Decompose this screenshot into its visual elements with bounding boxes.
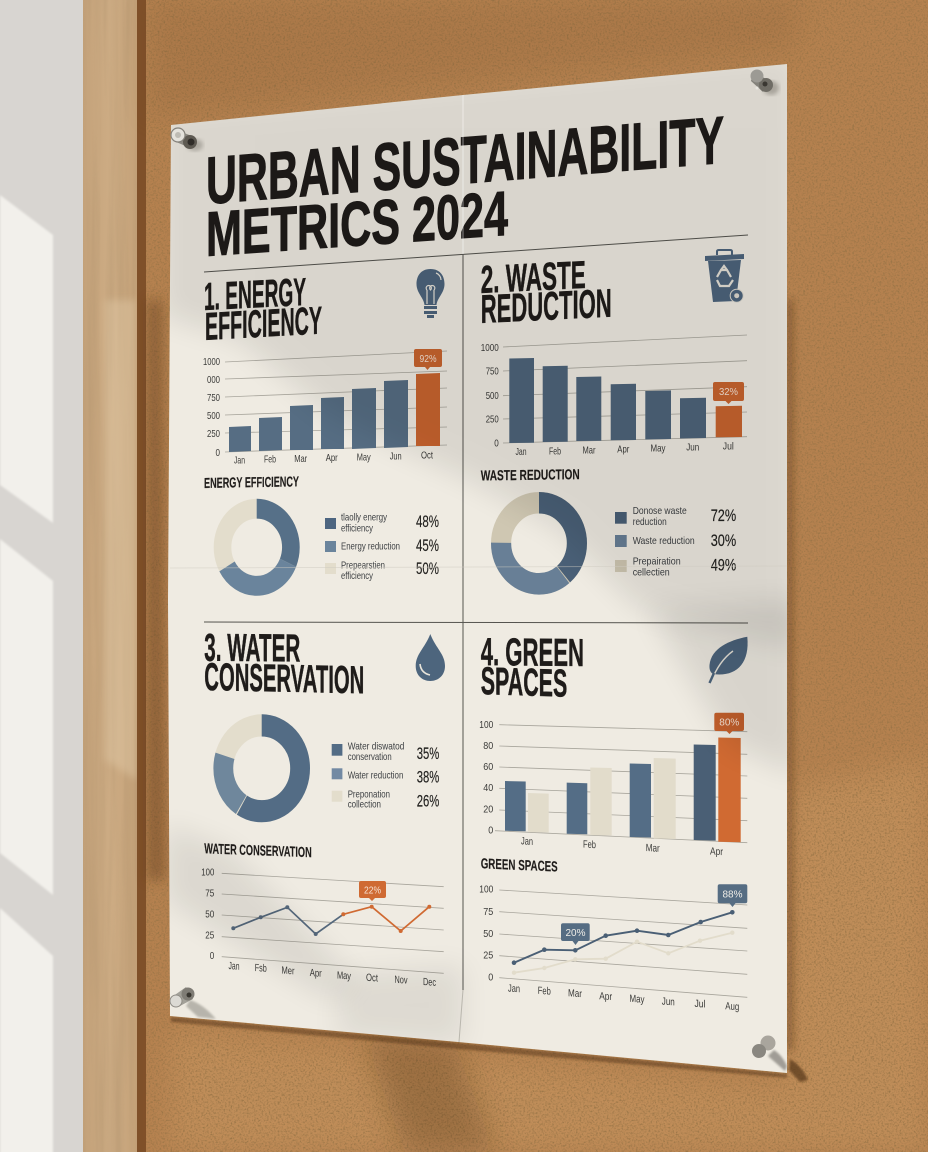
- bar chart: energy: [203, 349, 447, 466]
- legend: energy: efficiency: [341, 522, 374, 534]
- legend: energy: 45%: [416, 537, 439, 555]
- callout: 92%: 92%: [420, 353, 436, 365]
- wooden frame: [83, 0, 147, 1152]
- line chart: water: 100: [201, 867, 214, 879]
- bar chart: waste: May: [650, 442, 666, 454]
- bar chart: waste: Mar: [582, 444, 596, 456]
- section dividers: [204, 235, 748, 990]
- callout: 80%: [714, 713, 744, 734]
- line chart: water: 50: [205, 908, 214, 920]
- line chart: water: Mer: [282, 965, 295, 977]
- line chart: green: 0: [488, 972, 493, 984]
- line chart: water: Dec: [423, 976, 436, 989]
- bar chart: waste: Jan: [516, 446, 527, 458]
- poster sheet: [160, 50, 800, 1073]
- legend: water: Water reduction: [348, 770, 404, 782]
- donut chart: waste: [501, 503, 577, 584]
- legend: water: Preponation: [348, 788, 390, 800]
- bar chart: energy: Mar: [294, 453, 308, 465]
- icon: water drop: [416, 634, 445, 681]
- callout: 32%: 32%: [719, 386, 738, 398]
- line chart: water: 0: [210, 950, 214, 962]
- line chart: green: 25: [483, 949, 493, 961]
- callout: 22%: [359, 881, 386, 901]
- line chart: water: Apr: [310, 967, 322, 980]
- callout: 80%: 80%: [719, 716, 739, 728]
- legend: waste: Waste reduction: [633, 535, 695, 547]
- bar chart: waste: [481, 335, 747, 458]
- subheading: energy efficiency: ENERGY EFFICIENCY: [204, 474, 299, 492]
- grouped bar chart: green: [479, 713, 747, 858]
- bar chart: energy: 1000: [203, 356, 220, 368]
- heading: energy efficiency: 1. ENERGY: [204, 271, 306, 319]
- legend: waste: cellectien: [633, 566, 670, 578]
- bar chart: energy: 250: [207, 428, 220, 440]
- push pin: bottom left: [170, 987, 216, 1019]
- bar chart: energy: Feb: [264, 454, 276, 466]
- grouped bar chart: green: Apr: [710, 846, 723, 858]
- legend: energy: 50%: [416, 560, 439, 578]
- heading: water conservation: [204, 627, 364, 702]
- bar chart: energy: 000: [207, 374, 220, 386]
- grouped bar chart: green: 100: [479, 719, 493, 731]
- subheading: water conservation: WATER CONSERVATION: [204, 841, 312, 861]
- legend: waste: 72%: [711, 507, 736, 525]
- bar chart: waste: 1000: [481, 342, 499, 354]
- donut chart: energy: [223, 509, 291, 586]
- bar chart: energy: May: [357, 452, 371, 464]
- legend: energy: Prepearstien: [341, 560, 385, 572]
- grouped bar chart: green: 20: [483, 803, 493, 815]
- title: [206, 103, 724, 270]
- wall background: [0, 0, 84, 1152]
- legend: waste: 30%: [711, 532, 736, 550]
- donut chart: water: [223, 725, 300, 811]
- line chart: water: Nov: [394, 974, 408, 987]
- poster light and shadow: [160, 50, 800, 1045]
- heading: waste reduction: REDUCTION: [481, 282, 612, 332]
- line chart: green: [479, 884, 747, 1013]
- bar chart: waste: 750: [486, 366, 499, 378]
- heading: green spaces: [481, 631, 584, 706]
- line chart: green: Jul: [694, 998, 706, 1011]
- bar chart: energy: Jun: [390, 450, 402, 462]
- icon: recycling bin: [705, 250, 744, 302]
- callout: 88%: [718, 884, 747, 907]
- line chart: water: Jan: [228, 960, 240, 973]
- bar chart: waste: 500: [486, 390, 499, 402]
- bar chart: waste: 250: [486, 414, 499, 426]
- legend: water: Water diswatod: [348, 740, 405, 752]
- legend: energy: 48%: [416, 513, 439, 531]
- line chart: water: 75: [205, 888, 214, 900]
- legend: energy: [325, 512, 439, 582]
- heading: energy efficiency: [204, 271, 322, 349]
- legend: water: [332, 740, 440, 810]
- title: METRICS 2024: [206, 179, 508, 270]
- callout: 20%: [561, 923, 590, 945]
- legend: energy: Energy reduction: [341, 540, 400, 552]
- bar chart: waste: Jun: [686, 442, 699, 454]
- bar chart: energy: 500: [207, 410, 220, 422]
- legend: waste: 49%: [711, 556, 736, 574]
- grouped bar chart: green: 0: [488, 824, 493, 836]
- grouped bar chart: green: 60: [483, 761, 493, 773]
- bar chart: energy: Apr: [326, 452, 338, 464]
- legend: waste: reduction: [633, 516, 667, 528]
- line chart: green: May: [630, 993, 645, 1006]
- bar chart: waste: Feb: [549, 446, 561, 458]
- callout: 22%: 22%: [364, 884, 381, 896]
- line chart: water: Fsb: [255, 962, 267, 975]
- legend: waste: Donose waste: [633, 505, 687, 517]
- bar chart: waste: Jul: [723, 440, 734, 452]
- callout: 20%: 20%: [566, 927, 586, 939]
- heading: waste reduction: 2. WASTE: [481, 254, 586, 302]
- legend: water: 26%: [417, 792, 440, 810]
- line chart: green: Jun: [662, 996, 675, 1008]
- panel: waste reduction: [481, 250, 747, 584]
- line chart: water: Oct: [366, 972, 378, 985]
- line chart: green: 50: [483, 928, 493, 940]
- heading: green spaces: SPACES: [481, 660, 567, 706]
- push pin: top left: [171, 128, 203, 151]
- bar chart: energy: 750: [207, 392, 220, 404]
- heading: water conservation: 3. WATER: [204, 627, 300, 671]
- bar chart: waste: 0: [494, 438, 499, 450]
- bar chart: energy: Jan: [234, 454, 245, 466]
- panel: green spaces: [479, 631, 748, 1013]
- line chart: water: [201, 867, 444, 989]
- heading: water conservation: CONSERVATION: [204, 656, 364, 702]
- grouped bar chart: green: Jan: [521, 835, 533, 848]
- legend: waste: [615, 505, 736, 578]
- line chart: green: Aug: [725, 1000, 739, 1013]
- line chart: water: 25: [205, 929, 214, 941]
- line chart: green: Mar: [568, 987, 582, 1000]
- legend: water: 38%: [417, 768, 440, 786]
- legend: waste: Prepairation: [633, 556, 681, 568]
- grouped bar chart: green: Mar: [646, 842, 660, 855]
- subheading: green spaces: GREEN SPACES: [481, 856, 558, 876]
- bar chart: waste: Apr: [617, 444, 630, 456]
- line chart: green: Feb: [538, 985, 551, 998]
- panel: energy efficiency: [203, 269, 447, 586]
- line chart: green: Jan: [508, 983, 520, 995]
- push pin: top right: [750, 70, 779, 95]
- subheading: waste reduction: WASTE REDUCTION: [481, 467, 580, 484]
- line chart: green: 100: [479, 884, 493, 896]
- callout: 32%: [713, 382, 744, 404]
- grouped bar chart: green: 40: [483, 782, 493, 794]
- grouped bar chart: green: Feb: [583, 839, 596, 851]
- icon: light bulb: [416, 269, 444, 318]
- callout: 88%: 88%: [722, 888, 742, 900]
- bar chart: energy: Oct: [421, 450, 433, 462]
- callout: 92%: [414, 349, 442, 370]
- heading: waste reduction: [481, 254, 612, 332]
- line chart: green: Apr: [599, 990, 613, 1003]
- panel: water conservation: [201, 627, 445, 989]
- legend: water: collection: [348, 798, 381, 810]
- legend: energy: tlaolly energy: [341, 512, 388, 524]
- line chart: green: 75: [483, 906, 493, 918]
- grouped bar chart: green: 80: [483, 740, 493, 752]
- legend: energy: efficiency: [341, 570, 374, 582]
- push pin: bottom right: [752, 1036, 808, 1082]
- icon: leaf: [709, 637, 748, 683]
- line chart: water: May: [337, 970, 352, 983]
- legend: water: conservation: [348, 751, 392, 763]
- legend: water: 35%: [417, 745, 440, 763]
- heading: energy efficiency: EFFICIENCY: [205, 299, 322, 349]
- heading: green spaces: 4. GREEN: [481, 631, 584, 675]
- bar chart: energy: 0: [216, 447, 220, 459]
